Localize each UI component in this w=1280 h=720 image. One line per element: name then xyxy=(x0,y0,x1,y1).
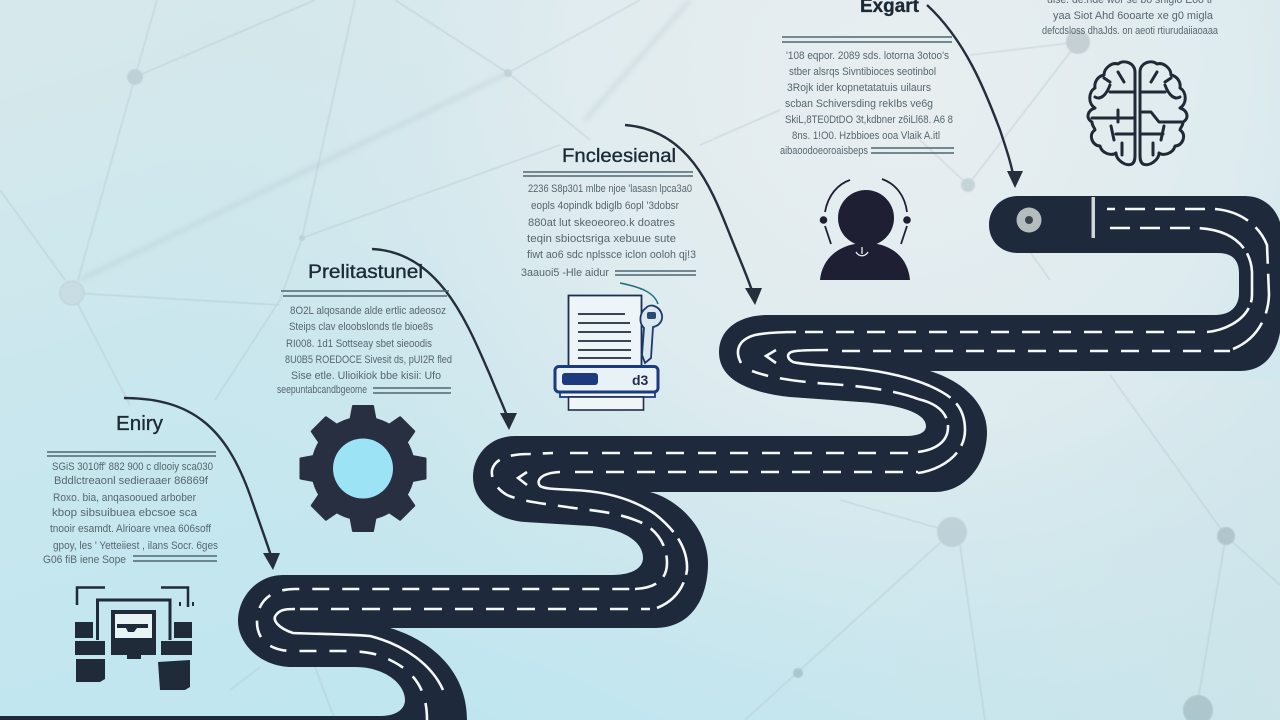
road lane markings xyxy=(257,209,1269,720)
text block: entry: Bddlctreaonl sedieraaer 86869f xyxy=(54,475,209,487)
text block: professional: fiwt ao6 sdc nplssce iclon ooloh qj!3 xyxy=(527,249,696,261)
text block: entry: kbop sibsuibuea ebcsoe sca xyxy=(52,507,198,519)
icon: machine xyxy=(75,588,194,690)
icon: document and key: d3 xyxy=(632,372,649,388)
heading: preliminary: Prelitastunel xyxy=(308,262,423,283)
text block: expert xyxy=(780,37,954,157)
text block: preliminary: Steips clav eloobslonds tle bioe8s xyxy=(289,321,433,333)
text block: preliminary: 8O2L alqosande alde ertlic adeosoz xyxy=(290,305,446,317)
text block: expert: aibaoodoeoroaisbeps xyxy=(780,145,868,157)
text block: expert: 3Rojk ider kopnetatatuis uilaurs xyxy=(787,82,931,94)
text block: professional: eopls 4opindk bdiglb 6opl '3dobsr xyxy=(531,200,679,212)
text block: expert: '108 eqpor. 2089 sds. lotorna 3otoo's xyxy=(786,50,949,62)
heading: entry: Eniry xyxy=(116,413,163,435)
text block: professional xyxy=(521,172,696,279)
panel: entry xyxy=(43,413,218,690)
icon: gear xyxy=(300,406,426,531)
panel: preliminary xyxy=(277,262,452,531)
text block: preliminary: 8U0B5 ROEDOCE Sivesit ds, pUI2R fled xyxy=(285,354,452,366)
winding road xyxy=(0,196,1280,720)
text block: entry: gpoy, les ' Yetteiiest , ilans Socr. 6ges xyxy=(53,540,218,552)
text block: professional: 880at lut skeoeoreo.k doatres xyxy=(528,217,675,229)
text block: preliminary: RI008. 1d1 Sottseay sbet sieoodis xyxy=(286,338,432,350)
heading: professional: Fncleesienal xyxy=(562,146,676,167)
road end marker xyxy=(1016,208,1042,232)
text block: entry xyxy=(43,452,218,566)
text block: professional: teqin sbioctsriga xebuue sute xyxy=(527,233,676,245)
text block: entry: G06 fiB iene Sope xyxy=(43,554,126,566)
text block: top right xyxy=(1042,0,1219,37)
text block: entry: Roxo. bia, anqasooued arbober xyxy=(53,492,196,504)
icon: document and key xyxy=(555,283,662,410)
panel: professional xyxy=(521,146,696,410)
text block: preliminary xyxy=(277,291,452,396)
text block: expert: SkiL,8TE0DtDO 3t,kdbner z6iLl68. A6 8 xyxy=(785,114,953,126)
text block: preliminary: Sise etle. Ulioikiok bbe kisii: Ufo xyxy=(291,370,441,382)
text block: expert: 8ns. 1!O0. Hzbbioes ooa Vlaik A.itl xyxy=(792,130,940,142)
text block: professional: 2236 S8p301 mlbe njoe 'lasasn lpca3a0 xyxy=(528,183,692,195)
icon: brain xyxy=(1088,62,1187,165)
text block: entry: SGiS 3010ff' 882 900 c dlooiy sca030 xyxy=(52,461,213,473)
text block: entry: tnooir esamdt. Alrioare vnea 606soff xyxy=(50,523,212,535)
arrow: professional xyxy=(625,125,762,305)
arrow: expert xyxy=(927,5,1023,188)
text block: top right: yaa Siot Ahd 6ooarte xe g0 migla xyxy=(1053,10,1214,22)
text block: preliminary: seepuntabcandbgeome xyxy=(277,384,367,396)
arrow: preliminary xyxy=(372,249,517,430)
text block: professional: 3aauoi5 -Hle aidur xyxy=(521,267,609,279)
text block: expert: scban Schiversding rekIbs ve6g xyxy=(785,98,933,110)
finish line xyxy=(1092,197,1095,238)
icon: person with halo xyxy=(820,179,911,280)
panel: top right block xyxy=(1042,0,1219,165)
text block: expert: stber alsrqs Sivntibioces seotinbol xyxy=(789,66,936,78)
arrow: entry xyxy=(124,398,280,570)
text block: top right: defcdsloss dhaJds. on aeoti rtiurudaiiaoaaa xyxy=(1042,25,1219,37)
panel: expert xyxy=(780,0,954,280)
